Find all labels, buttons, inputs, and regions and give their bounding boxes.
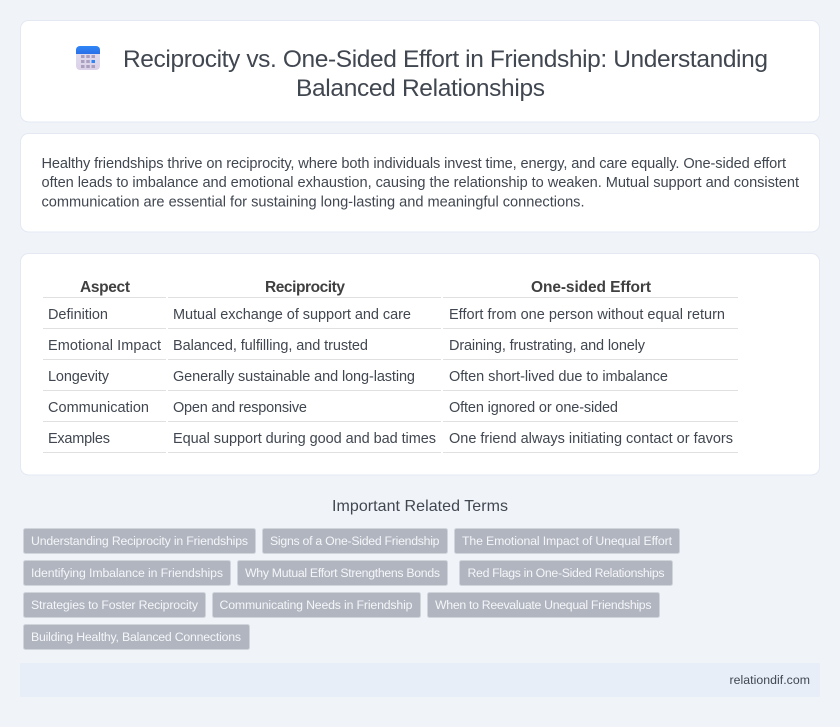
panel: header [20,20,820,122]
table row: examples: Equal support during good and bad times [173,431,436,447]
table row: examples [48,431,733,447]
text block: introduction [42,156,799,210]
table row: definition: Mutual exchange of support and care [173,307,411,323]
table row: communication: Open and responsive [173,400,307,416]
tag [24,592,206,618]
text block: introduction: often leads to imbalance and emotional exhaustion, causing the relationship to weaken. Mutual support and consistent [42,175,799,191]
panel: related term tags [24,528,680,650]
tag: Communicating Needs in Friendship [220,598,413,612]
tag: Building Healthy, Balanced Connections [31,630,241,644]
tag: Understanding Reciprocity in Friendships [31,534,248,548]
icon: calendar [76,46,100,70]
table row: communication: Communication [48,400,149,416]
tag [24,528,256,554]
tag [24,624,250,650]
tag: Signs of a One-Sided Friendship [270,534,440,548]
tag [238,560,448,586]
title [123,46,768,102]
table row: longevity: Often short-lived due to imbalance [449,369,668,385]
tag [460,560,672,586]
table row: emotional impact: Draining, frustrating, and lonely [449,338,646,354]
tag: Strategies to Foster Reciprocity [31,598,199,612]
tag: Identifying Imbalance in Friendships [31,566,223,580]
table row: emotional impact [48,338,646,354]
title: Balanced Relationships [296,75,545,102]
footer [20,663,820,697]
tag [212,592,420,618]
table row: definition: Definition [48,307,108,323]
title: Reciprocity vs. One-Sided Effort in Friendship: Understanding [123,46,768,73]
tag [24,560,230,586]
panel: introduction [20,134,820,232]
table header [80,279,651,296]
tag [454,528,680,554]
table header: One-sided Effort [531,279,651,296]
table header: Aspect [80,279,130,296]
tag: When to Reevaluate Unequal Friendships [435,598,652,612]
tag [428,592,660,618]
table row: longevity [48,369,668,385]
table row: communication [48,400,618,416]
tag: Why Mutual Effort Strengthens Bonds [245,566,440,580]
table row: longevity: Longevity [48,369,110,385]
table row: longevity: Generally sustainable and long-lasting [173,369,415,385]
table row: examples: Examples [48,431,110,447]
tag: The Emotional Impact of Unequal Effort [462,534,673,548]
tag [262,528,448,554]
table row: definition [48,307,725,323]
table header: Reciprocity [265,279,345,296]
footer: relationdif.com [730,673,810,687]
table row: emotional impact: Balanced, fulfilling, and trusted [173,338,368,354]
tag: Red Flags in One-Sided Relationships [468,566,664,580]
table row: examples: One friend always initiating contact or favors [449,431,733,447]
text block: introduction: Healthy friendships thrive on reciprocity, where both individuals invest time, energy, and care equally. One-sided effort [42,156,786,172]
panel: comparison table [20,254,820,475]
table row: definition: Effort from one person without equal return [449,307,725,323]
text block: introduction: communication are essential for sustaining long-lasting and meaningful connections. [42,194,584,210]
table row: communication: Often ignored or one-sided [449,400,618,416]
table row: emotional impact: Emotional Impact [48,338,161,354]
heading: important related terms: Important Related Terms [332,498,508,515]
